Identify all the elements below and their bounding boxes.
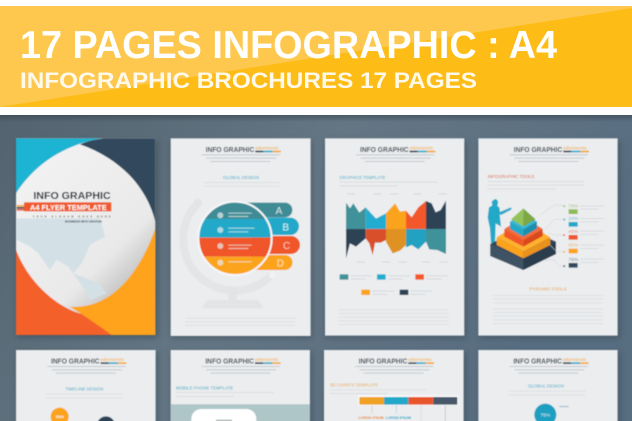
page header: INFO GRAPHIC [51,359,100,366]
timeline bubble 2014: 2014 [56,415,65,419]
panel: globe page [171,138,311,336]
page header: INFO GRAPHIC [206,147,254,154]
globe tabs: D [277,258,284,269]
globe tabs: B [282,222,289,233]
stacked bar [358,396,458,405]
page header: INFO GRAPHIC [513,359,562,366]
section title: TIMELINE DESIGN [65,387,103,392]
page header [47,357,126,374]
page header: elements [563,145,588,150]
page header: elements [563,357,587,362]
page header: INFO GRAPHIC [205,359,254,366]
donut label [559,405,569,408]
cover slogan: YOUR SLOGAN GOES HERE [33,214,111,218]
globe stand [183,198,276,308]
page header: INFO GRAPHIC [360,147,409,154]
bar label orange: LOREM IPSUM [358,416,384,420]
panel: pyramid page [478,138,618,336]
area chart [346,193,448,263]
pyramid legend: 65% [568,243,579,249]
panel: global design page [478,350,618,421]
panel: graphics template page [325,138,464,336]
cover ribbon: A4 FLYER TEMPLATE [30,203,107,212]
pyramid legend: 20% [568,216,579,222]
page header: elements [255,357,279,362]
page header: elements [101,357,125,362]
pyramid tools title: PYRAMID TOOLS [529,286,567,291]
panel: mobile phone page [171,350,310,421]
pyramid legend: 45% [568,229,579,235]
page header: elements [410,145,434,150]
cover navy corner [80,138,155,222]
page header: INFO GRAPHIC [514,147,562,154]
icon: presenter [488,199,512,243]
page header [510,145,589,162]
cover map [17,218,107,300]
donut 75%: 75% [540,413,551,419]
page header [355,357,434,374]
section title: GLOBAL DESIGN [223,175,259,180]
section title: GRAPHICS TEMPLATE [339,175,385,180]
globe tabs: A [276,206,283,217]
banner title: 17 PAGES INFOGRAPHIC : A4 [20,24,557,67]
page header [202,145,281,162]
page header: elements [255,145,280,150]
globe tabs [245,203,300,270]
banner subtitle: INFOGRAPHIC BROCHURES 17 PAGES [20,68,477,93]
globe sphere [198,202,272,275]
cover amber corner [70,228,155,335]
pyramid legend: 75% [568,204,579,210]
cover cyan corner [16,138,102,193]
pyramid legend: 75% [568,257,579,263]
page header: elements [408,357,433,362]
teal band [171,404,310,421]
pyramid legend [540,204,604,268]
section title: INFOGRAPHIC TOOLS [488,174,534,179]
chart legend [340,274,448,295]
section title: 3D CHARTS TEMPLATE [330,382,378,387]
globe tabs: C [283,241,290,252]
panel: cover page [16,138,155,335]
page header [356,145,435,162]
page header [202,357,281,374]
bar drop lines [372,405,446,421]
panel: timeline page [16,350,156,421]
section title: GLOBAL DESIGN [528,383,564,388]
phone [191,409,256,421]
cover heading: INFO GRAPHIC [33,191,111,202]
bar label blue: LOREM IPSUM [386,416,411,420]
panel: 3D charts page [324,350,464,421]
pyramid [490,208,556,270]
section title: MOBILE PHONE TEMPLATE [176,385,233,390]
page background [0,114,632,421]
page header: INFO GRAPHIC [359,359,407,366]
page header [510,357,589,374]
cover small text: BUSINESS INFO GRAPHIC [65,220,103,224]
banner [0,0,632,115]
timeline bubble dark [97,416,115,421]
cover orange corner [16,250,112,335]
